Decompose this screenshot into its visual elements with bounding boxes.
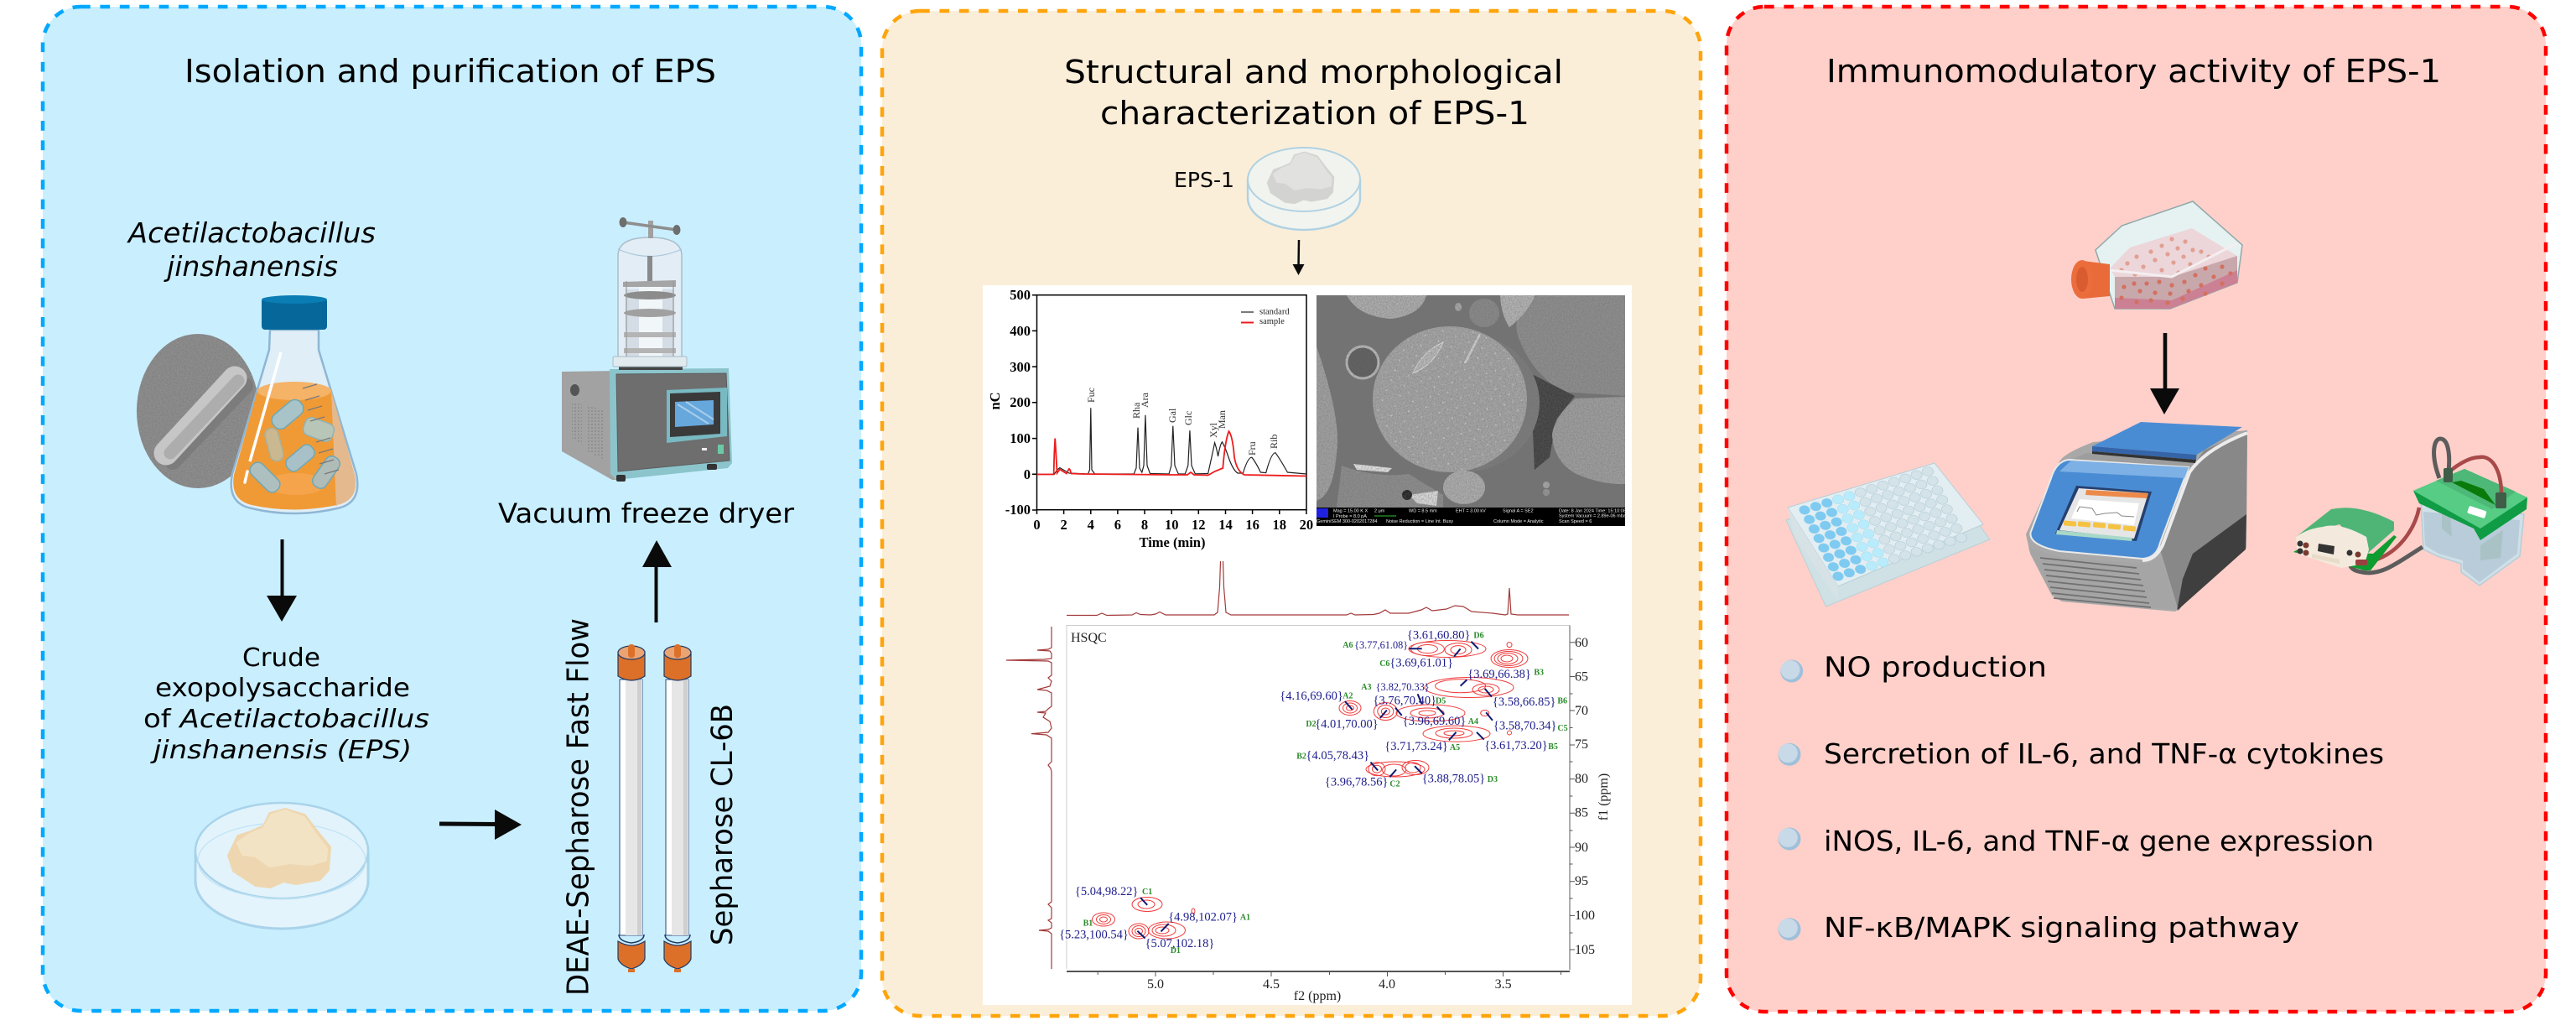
- chart: HSQC NMR spectrum: D2: [1306, 720, 1317, 729]
- chart: HSQC NMR spectrum: f1 (ppm): [1597, 773, 1611, 820]
- chart: HSQC NMR spectrum: A4: [1468, 717, 1478, 726]
- chart: monosaccharide composition chromatogram: Xyl: [1208, 422, 1219, 438]
- label: Sepharose CL-6B: Sepharose CL-6B: [706, 704, 740, 945]
- chart: HSQC NMR spectrum: A1: [1240, 913, 1250, 922]
- chart: monosaccharide composition chromatogram: Ara: [1139, 392, 1150, 408]
- heading: structural characterization: [1064, 54, 1563, 132]
- text: crude exopolysaccharide: of Acetilactobacillus: [143, 705, 429, 734]
- chart: HSQC NMR spectrum: B2: [1296, 752, 1306, 761]
- icon: cell culture flask: [2071, 201, 2242, 309]
- chart: HSQC NMR spectrum: C2: [1389, 780, 1400, 789]
- chart: monosaccharide composition chromatogram: nC: [987, 392, 1003, 410]
- icon: electrophoresis power supply and gel tank: [2293, 439, 2527, 586]
- chart: monosaccharide composition chromatogram: 200: [1010, 394, 1031, 410]
- image: SEM micrograph of EPS-1: Scan Speed = 6: [1559, 519, 1592, 524]
- icon: culture flask: [231, 295, 357, 513]
- image: SEM micrograph of EPS-1: Noise Reduction = Line Int. Busy: [1386, 519, 1453, 524]
- chart: HSQC NMR spectrum: C5: [1557, 724, 1568, 733]
- heading: isolation and purification: Isolation and purification of EPS: [184, 53, 716, 90]
- chart: HSQC NMR spectrum: {3.77,61.08}: [1354, 639, 1408, 651]
- heading: structural characterization: Structural and morphological: [1064, 54, 1563, 91]
- chart: HSQC NMR spectrum: {4.16,69.60}: [1280, 690, 1343, 703]
- image: SEM micrograph of EPS-1: WD = 8.5 mm: [1409, 508, 1437, 513]
- bullet 3: [1778, 827, 1801, 851]
- chart: monosaccharide composition chromatogram: 8: [1141, 517, 1148, 533]
- icon: SEM image of rod bacterium: [137, 334, 259, 488]
- species label: Acetilactobacillus: [127, 216, 376, 249]
- chart: HSQC NMR spectrum: 95: [1575, 874, 1588, 888]
- image: SEM micrograph of EPS-1: Date: 8 Jan 2024 Time: 15:10:08: [1559, 508, 1626, 513]
- species label: [127, 216, 376, 283]
- image: SEM micrograph of EPS-1: EHT = 3.00 kV: [1456, 508, 1486, 513]
- chart: HSQC NMR spectrum: 90: [1575, 841, 1588, 855]
- chart: monosaccharide composition chromatogram: standard: [1259, 307, 1290, 317]
- chart: HSQC NMR spectrum: {3.69,66.38}: [1467, 668, 1531, 681]
- icon: vacuum freeze dryer: [562, 217, 732, 482]
- chart: monosaccharide composition chromatogram: 0: [1024, 466, 1031, 482]
- image: SEM micrograph of EPS-1: I Probe = 8.0 pA: [1333, 514, 1367, 519]
- bullet 1: [1780, 659, 1803, 683]
- chart: HSQC NMR spectrum: 80: [1575, 772, 1588, 786]
- chart: monosaccharide composition chromatogram: 0: [1033, 517, 1041, 533]
- text: NO production: NO production: [1824, 651, 2047, 684]
- chart: HSQC NMR spectrum: 85: [1575, 805, 1588, 820]
- label: DEAE-Sepharose Fast Flow: DEAE-Sepharose Fast Flow: [562, 618, 595, 996]
- image: SEM micrograph of EPS-1: Column Mode = Analytic: [1493, 519, 1544, 524]
- chart: HSQC NMR spectrum: 100: [1575, 909, 1595, 923]
- chart: monosaccharide composition chromatogram: Glc: [1182, 411, 1194, 425]
- chart: HSQC NMR spectrum: 5.0: [1147, 977, 1164, 992]
- chart: HSQC NMR spectrum: 3.5: [1495, 977, 1512, 992]
- chart: monosaccharide composition chromatogram: Rib: [1268, 435, 1280, 449]
- chart: HSQC NMR spectrum: {3.82,70.33}: [1376, 681, 1430, 693]
- arrow: EPS-1 to analysis: [1293, 240, 1305, 275]
- chart: monosaccharide composition chromatogram: -100: [1005, 502, 1031, 518]
- heading: structural characterization: characterization of EPS-1: [1100, 95, 1530, 132]
- chart: HSQC NMR spectrum: f2 (ppm): [1294, 989, 1341, 1003]
- chart: monosaccharide composition chromatogram: 6: [1114, 517, 1121, 533]
- text: signaling pathway: NF-κB/MAPK signaling pathway: [1824, 911, 2299, 944]
- arrow: flask to crude EPS: [267, 539, 297, 622]
- chart: HSQC NMR spectrum: {3.76,70.40}: [1374, 695, 1436, 708]
- chart: HSQC NMR spectrum: {4.01,70.00}: [1315, 718, 1379, 732]
- chart: monosaccharide composition chromatogram: 500: [1010, 287, 1031, 303]
- chart: monosaccharide composition chromatogram: 18: [1273, 517, 1286, 533]
- chart: HSQC NMR spectrum: {5.04,98.22}: [1075, 885, 1138, 898]
- panel 1 background: [43, 7, 861, 1011]
- chart: HSQC NMR spectrum: C6: [1379, 659, 1389, 669]
- panel 3 background: [1727, 7, 2546, 1012]
- chart: monosaccharide composition chromatogram: 400: [1010, 323, 1031, 339]
- chart: HSQC NMR spectrum: D6: [1473, 631, 1484, 641]
- chart: HSQC NMR spectrum: B6: [1557, 696, 1567, 706]
- icon: 96-well plate: [1786, 463, 1990, 607]
- chart: HSQC NMR spectrum: {3.96,78.56}: [1325, 776, 1388, 789]
- chart: monosaccharide composition chromatogram: 4: [1088, 517, 1094, 533]
- chart: monosaccharide composition chromatogram: 10: [1165, 517, 1178, 533]
- chart: HSQC NMR spectrum: D3: [1488, 775, 1498, 784]
- text: crude exopolysaccharide: jinshanensis (EPS): [150, 736, 412, 765]
- chart: HSQC NMR spectrum: {3.58,70.34}: [1493, 719, 1556, 732]
- chart: HSQC NMR spectrum: {5.23,100.54}: [1059, 928, 1129, 941]
- list: assays: [1778, 651, 2384, 944]
- chart: HSQC NMR spectrum: 105: [1575, 943, 1595, 957]
- chart: monosaccharide composition chromatogram: Fuc: [1085, 388, 1097, 403]
- chart: HSQC NMR spectrum: B1: [1083, 919, 1093, 929]
- chart: HSQC NMR spectrum: {3.71,73.24}: [1384, 740, 1448, 753]
- chart: HSQC NMR spectrum: B3: [1534, 668, 1544, 677]
- panel 2 background: [882, 11, 1701, 1016]
- chart: HSQC NMR spectrum: 65: [1575, 669, 1588, 684]
- chart: HSQC NMR spectrum: A2: [1343, 691, 1353, 701]
- image: SEM micrograph of EPS-1: Signal A = SE2: [1503, 508, 1534, 513]
- chart: HSQC NMR spectrum: 75: [1575, 737, 1588, 752]
- chart: HSQC NMR spectrum: {3.58,66.85}: [1493, 695, 1555, 709]
- chart: monosaccharide composition chromatogram: [987, 287, 1313, 550]
- chart: HSQC NMR spectrum: D1: [1171, 946, 1181, 955]
- chart: HSQC NMR spectrum: {4.05,78.43}: [1306, 749, 1369, 763]
- arrow: flask to assays: [2150, 333, 2179, 414]
- chart: monosaccharide composition chromatogram: Fru: [1246, 441, 1258, 456]
- chart: HSQC NMR spectrum: HSQC: [1071, 631, 1107, 645]
- panel: isolation and purification of EPS: [43, 7, 861, 1011]
- chart: HSQC NMR spectrum: 60: [1575, 636, 1588, 650]
- image: SEM micrograph of EPS-1: GeminiSEM 300-0202017284: [1317, 519, 1377, 524]
- icon: column 1: [618, 644, 645, 972]
- chart: HSQC NMR spectrum: 4.0: [1379, 977, 1395, 992]
- heading: immunomodulatory activity: Immunomodulatory activity of EPS-1: [1826, 53, 2441, 90]
- arrow: EPS to chromatography: [439, 810, 522, 840]
- image: SEM micrograph of EPS-1: [1317, 295, 1628, 526]
- icon: dish with EPS-1: [1248, 148, 1360, 230]
- chart: HSQC NMR spectrum: A5: [1450, 743, 1460, 752]
- chart: monosaccharide composition chromatogram: sample: [1259, 317, 1285, 326]
- species label: jinshanensis: [164, 250, 338, 283]
- chart: HSQC NMR spectrum: A6: [1343, 641, 1353, 650]
- chart: monosaccharide composition chromatogram: Man: [1216, 410, 1228, 429]
- chart: HSQC NMR spectrum: 4.5: [1263, 977, 1280, 992]
- chart: HSQC NMR spectrum: {3.96,69.60}: [1403, 715, 1466, 728]
- chart: HSQC NMR spectrum: {3.88,78.05}: [1422, 772, 1485, 785]
- icon: PCR thermocycler: [2026, 422, 2247, 612]
- chart: monosaccharide composition chromatogram: 2: [1060, 517, 1067, 533]
- chart: monosaccharide composition chromatogram: 14: [1218, 517, 1233, 533]
- chart: monosaccharide composition chromatogram: 16: [1245, 517, 1259, 533]
- chart: monosaccharide composition chromatogram: 20: [1300, 517, 1313, 533]
- chart: HSQC NMR spectrum: {3.69,61.01}: [1389, 657, 1453, 670]
- text: gene expression: iNOS, IL-6, and TNF-α gene expression: [1824, 825, 2374, 857]
- arrow: columns to freeze dryer: [642, 540, 672, 622]
- label: EPS-1: EPS-1: [1174, 168, 1234, 192]
- chart: HSQC NMR spectrum: B5: [1548, 742, 1558, 752]
- text: crude exopolysaccharide: Crude: [242, 643, 320, 673]
- chart: monosaccharide composition chromatogram: Rha: [1130, 402, 1142, 419]
- chart: HSQC NMR spectrum: {3.61,73.20}: [1484, 739, 1548, 752]
- chart: HSQC NMR spectrum: {4.98,102.07}: [1168, 910, 1238, 924]
- chart: HSQC NMR spectrum: {5.07,102.18}: [1145, 937, 1214, 950]
- panel: immunomodulatory activity of EPS-1: [1727, 7, 2546, 1012]
- chart: monosaccharide composition chromatogram: Time (min): [1140, 534, 1205, 550]
- label: vacuum freeze dryer: Vacuum freeze dryer: [498, 497, 795, 529]
- image: SEM micrograph of EPS-1: Mag = 15.00 K X: [1333, 508, 1368, 513]
- text: cytokine secretion: Sercretion of IL-6, and TNF-α cytokines: [1824, 737, 2384, 770]
- chart: HSQC NMR spectrum: {3.61,60.80}: [1407, 629, 1470, 643]
- chart: HSQC NMR spectrum: 70: [1575, 704, 1588, 718]
- image: SEM micrograph of EPS-1: 2 μm: [1374, 508, 1385, 513]
- image: SEM micrograph of EPS-1: System Vacuum = 2.89e-06 mbar: [1559, 513, 1628, 518]
- text: crude exopolysaccharide: [143, 643, 429, 765]
- text: crude exopolysaccharide: exopolysaccharide: [155, 674, 410, 703]
- panel: structural and morphological characterization: [882, 11, 1701, 1016]
- icon: column 2: [664, 644, 691, 972]
- chart: HSQC NMR spectrum: C1: [1142, 888, 1152, 897]
- chart: monosaccharide composition chromatogram: 100: [1010, 430, 1031, 446]
- chart: monosaccharide composition chromatogram: Gal: [1166, 408, 1178, 423]
- chart: monosaccharide composition chromatogram: 12: [1192, 517, 1206, 533]
- chart: HSQC NMR spectrum: [1006, 561, 1611, 1003]
- chart: monosaccharide composition chromatogram: 300: [1010, 359, 1031, 375]
- white figure panel: [983, 285, 1632, 1005]
- chart: HSQC NMR spectrum: A3: [1361, 683, 1372, 692]
- bullet 2: [1778, 743, 1801, 766]
- icon: dish with crude EPS: [195, 803, 368, 929]
- chart: HSQC NMR spectrum: D5: [1436, 696, 1446, 706]
- bullet 4: [1778, 918, 1801, 940]
